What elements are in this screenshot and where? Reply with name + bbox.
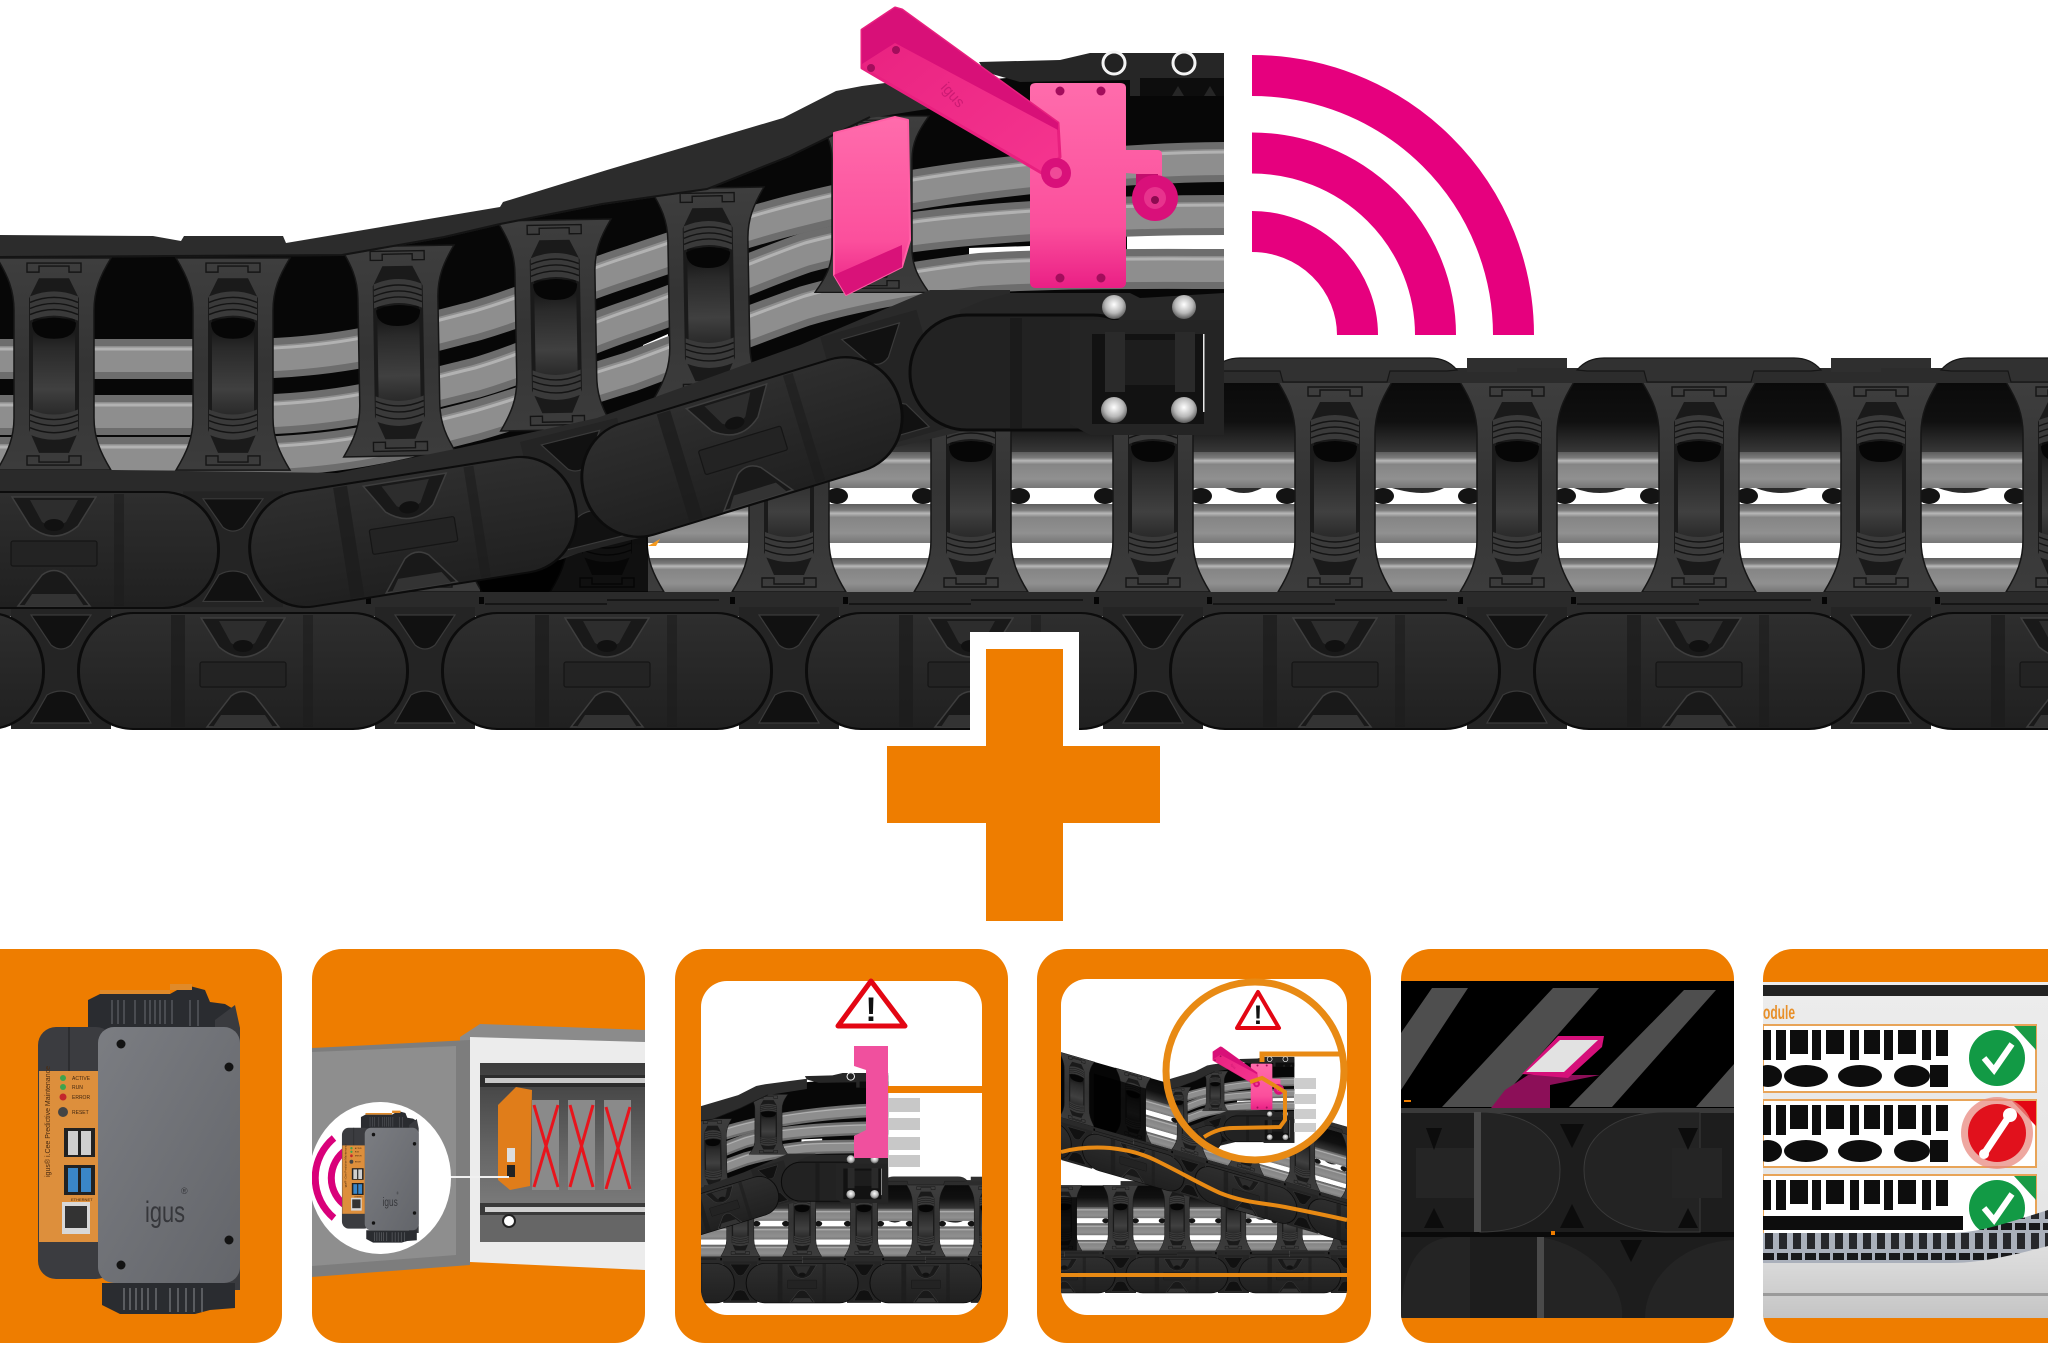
top end bracket (979, 52, 1224, 96)
icon: igus controller device (38, 984, 240, 1314)
pivot joint (1041, 158, 1071, 188)
chain windows with cables (300, 382, 2048, 594)
wifi signal icon (1252, 76, 1514, 335)
panel: sensor close-up (1401, 949, 1734, 1343)
icon: wireless waves (315, 1138, 346, 1218)
panel: chain warning (675, 949, 1008, 1343)
status row: maintenance (1754, 1097, 2036, 1169)
black chain interior (1401, 981, 1734, 1111)
status row: OK (1754, 1025, 2036, 1092)
adjustment knob (1132, 174, 1178, 221)
icon: warning triangle (1237, 992, 1279, 1030)
panel: control cabinet (309, 949, 645, 1343)
icon: igus controller device: ACTIVE (72, 1076, 91, 1082)
orange controller in cabinet (498, 1087, 532, 1190)
pink sensor arm and mounting plate (862, 8, 1178, 288)
icon: miniature controller (342, 1111, 419, 1243)
panel: signal monitoring (1037, 949, 1371, 1343)
panel: controller unit (0, 949, 282, 1343)
chain lower strips (0, 592, 2048, 616)
white inner panel (701, 981, 982, 1315)
arm top face (862, 8, 1058, 130)
sensor arm body (862, 8, 1060, 175)
card background (0, 949, 282, 1343)
orange trace lines (1061, 982, 1347, 1275)
pink sensor in chain (1488, 1036, 1604, 1112)
cable bundle (0, 152, 1230, 457)
bottom end bracket with bolts (910, 293, 1224, 435)
card background (675, 949, 1008, 1343)
icon: igus controller device: ERROR (72, 1095, 90, 1101)
screen base line (1763, 1293, 2048, 1296)
icon: igus controller device: igus (145, 1196, 185, 1229)
orange signal line (888, 1086, 982, 1093)
panel: software dashboard (1754, 949, 2048, 1343)
miniature chain scene (787, 986, 1656, 1331)
main energy chain: upper tilted run with end bracket (0, 52, 1230, 616)
cabinet body (460, 1024, 645, 1270)
white inner panel (1061, 979, 1347, 1315)
screen top bar (1763, 985, 2048, 996)
miniature chain (374, 1073, 1252, 1303)
crossed out modules (532, 1100, 631, 1190)
upper chain side plates (0, 310, 950, 616)
card background (1401, 949, 1734, 1343)
icon: igus controller device: ® (181, 1186, 188, 1196)
chain side plates (1401, 1108, 1734, 1318)
cabinet door (312, 1040, 470, 1277)
magnifier circle with device (309, 1102, 451, 1254)
icon: warning triangle: ! (1254, 1000, 1262, 1030)
icon: igus controller device: RUN (72, 1085, 83, 1091)
dashboard heading: odule (1763, 1003, 1795, 1024)
icon: igus controller device: RESET (72, 1110, 89, 1116)
status row: OK partial (1763, 1175, 2036, 1237)
magnified chain end with sensor (1170, 1046, 1324, 1156)
icon: igus controller device: igus® i.Cee Predictive Maintenance (44, 1066, 52, 1177)
upper chain window background (0, 60, 1224, 485)
chain top cover strips (789, 358, 2048, 383)
arm end screws and logo: igus (937, 79, 968, 111)
main energy chain: lower straight run (0, 358, 2048, 730)
screen background (1763, 982, 2048, 1318)
icon: pink sensor side view (854, 1046, 888, 1158)
icon: warning triangle: ! (865, 991, 877, 1029)
miniature chain along bottom (1763, 1210, 2048, 1263)
orange plus sign (887, 632, 1160, 921)
arm end screws and logo (867, 46, 968, 111)
white connector line (450, 1176, 509, 1178)
tiny orange marks (1404, 1100, 1555, 1235)
diagonal grey crossbars (1401, 988, 1734, 1107)
icon: warning triangle (838, 981, 905, 1029)
chain columns (368, 382, 2048, 596)
chain side plates and connectors (0, 607, 2048, 730)
card background (312, 949, 645, 1343)
small orange fragment behind chain (648, 539, 660, 546)
mounting plate (1030, 83, 1162, 288)
white gaps behind cables (643, 233, 1224, 362)
upper chain columns (0, 116, 929, 470)
plate mounting holes (1056, 86, 1106, 282)
upper chain cover strip (0, 70, 985, 258)
pink sensor box, left (834, 117, 910, 295)
icon: igus controller device: ETHERNET (71, 1197, 93, 1202)
upper chain lower band (0, 290, 1010, 590)
card background (1037, 949, 1371, 1343)
card background (1763, 949, 2048, 1343)
